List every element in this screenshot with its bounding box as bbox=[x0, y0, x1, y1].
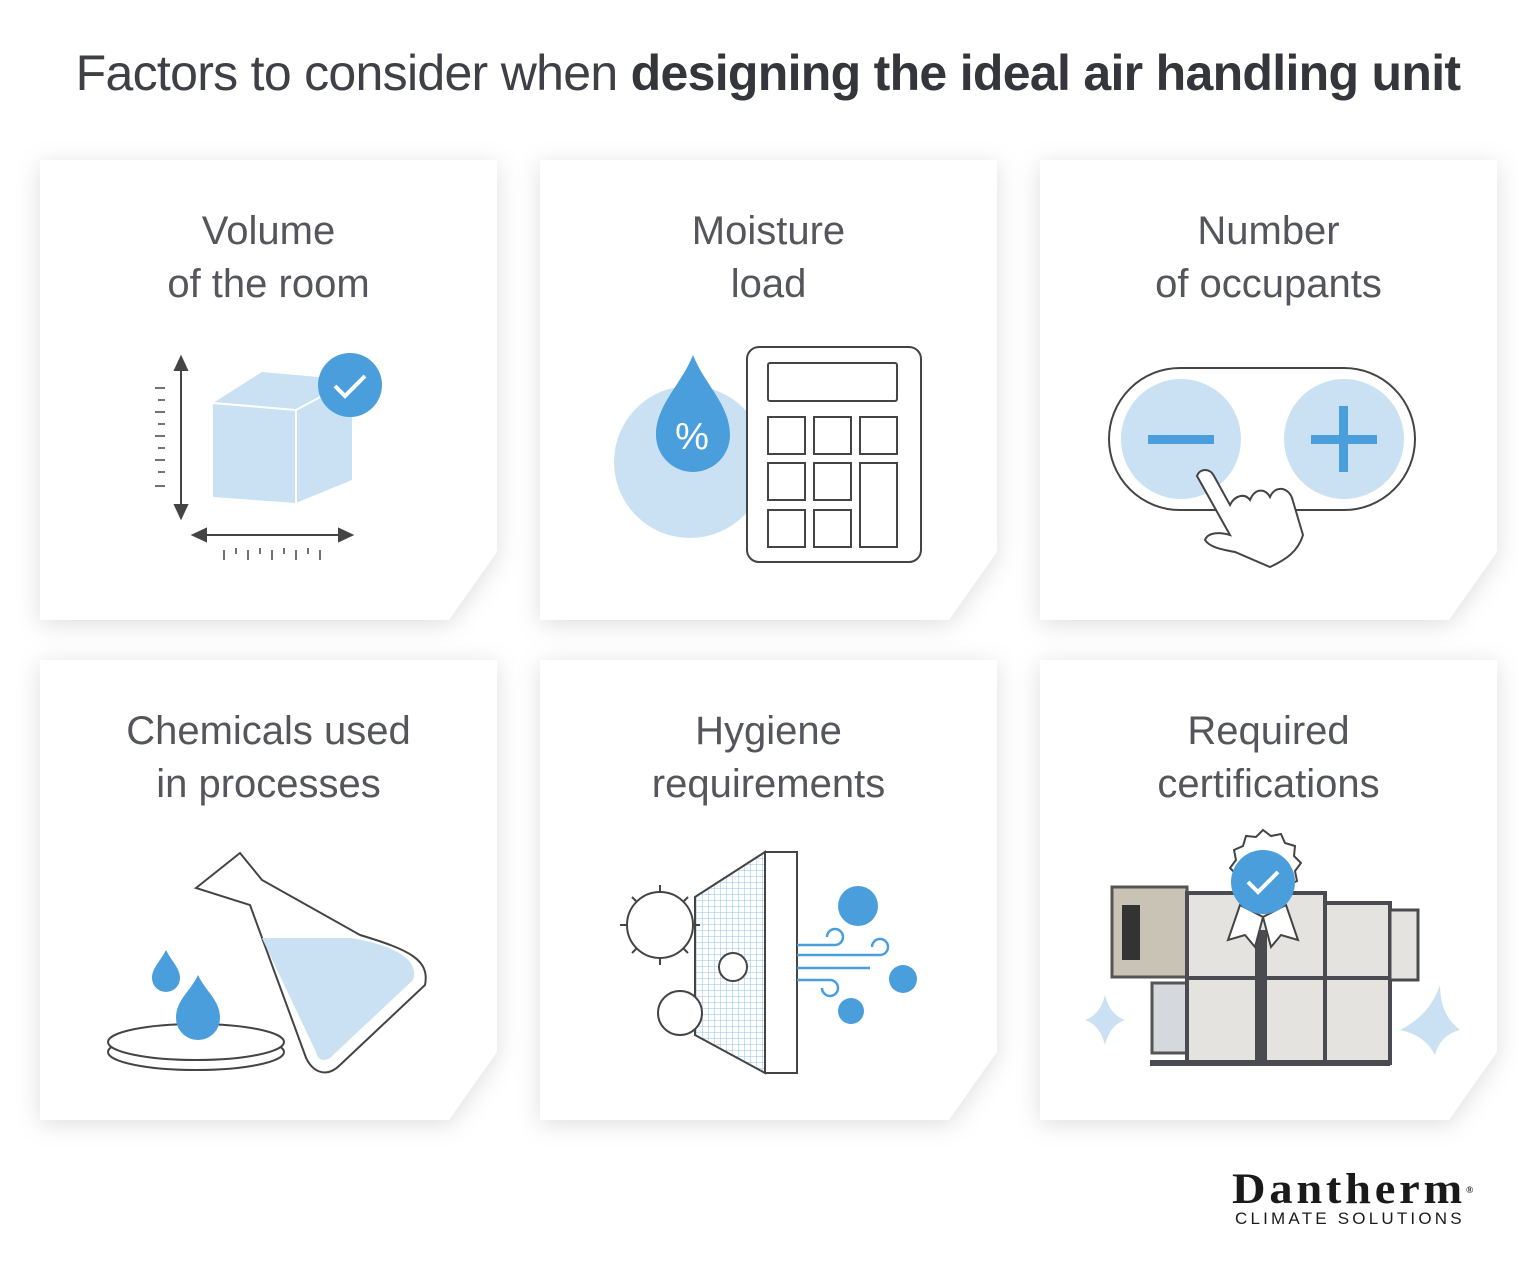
heading: hygiene: requirements bbox=[652, 762, 885, 806]
panel: hygiene bbox=[532, 656, 1004, 1132]
panel: chemicals bbox=[32, 656, 504, 1132]
heading: chemicals bbox=[128, 715, 408, 806]
icon: plus minus buttons bbox=[1108, 367, 1416, 568]
panel: moisture load bbox=[532, 156, 1004, 632]
icon: air handling unit with badge bbox=[1085, 828, 1460, 1066]
icon: filter with virus and air bbox=[620, 850, 917, 1075]
heading: certifications: Required bbox=[1187, 709, 1350, 753]
heading: moisture: load bbox=[731, 262, 806, 306]
icon: drop and calculator: % bbox=[675, 416, 709, 458]
heading: moisture: Moisture bbox=[692, 209, 845, 253]
heading: occupants: of occupants bbox=[1155, 262, 1382, 306]
heading: volume bbox=[169, 215, 368, 298]
heading: chemicals: Chemicals used bbox=[126, 709, 411, 753]
panel: number of occupants bbox=[1032, 156, 1504, 632]
heading: moisture bbox=[695, 215, 844, 298]
icon: flask and petri dish bbox=[107, 852, 427, 1074]
icon: drop and calculator bbox=[614, 346, 922, 563]
heading: volume: Volume bbox=[202, 209, 335, 253]
panel: volume of the room bbox=[32, 156, 504, 632]
heading: occupants: Number bbox=[1197, 209, 1340, 253]
heading: certifications bbox=[1159, 715, 1378, 798]
title: Factors to consider when designing the ideal air handling unit bbox=[76, 45, 1460, 101]
icon: cube with dimensions bbox=[155, 353, 382, 560]
heading: hygiene: Hygiene bbox=[695, 709, 842, 753]
heading: volume: of the room bbox=[167, 262, 370, 306]
panel: certifications bbox=[1032, 656, 1504, 1132]
heading: hygiene bbox=[654, 715, 884, 806]
logo: Dantherm® bbox=[1232, 1166, 1477, 1213]
heading: occupants bbox=[1156, 215, 1380, 306]
logo: CLIMATE SOLUTIONS bbox=[1235, 1209, 1465, 1228]
heading: certifications: certifications bbox=[1157, 762, 1380, 806]
heading: chemicals: in processes bbox=[156, 762, 381, 806]
